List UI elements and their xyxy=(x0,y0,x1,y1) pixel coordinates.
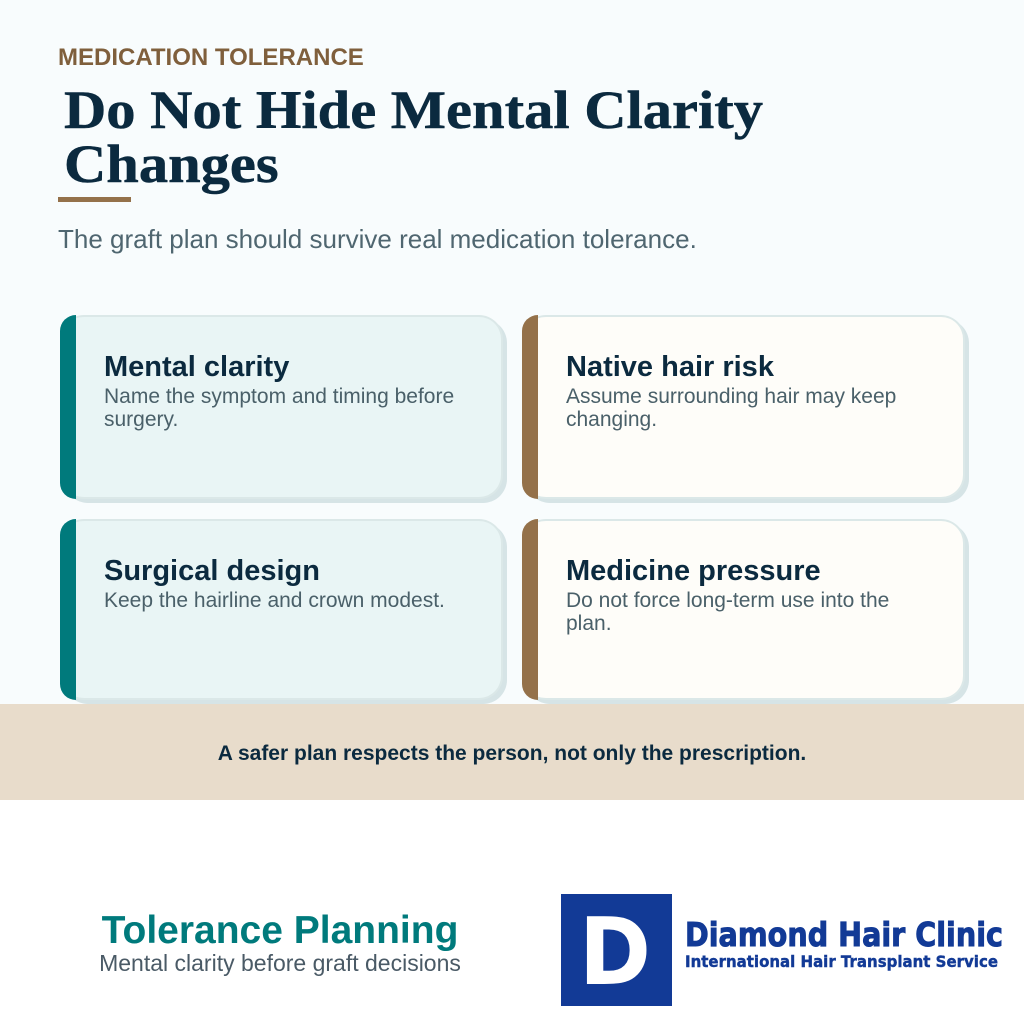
panel: surgical design xyxy=(60,519,507,704)
title: Changes xyxy=(64,134,279,194)
callout text: A safer plan respects the person, not only the prescription. xyxy=(218,742,806,765)
title accent rule xyxy=(58,197,131,202)
title xyxy=(64,80,763,194)
text: native hair risk: changing. xyxy=(566,408,657,431)
text: native hair risk: Assume surrounding hair may keep xyxy=(566,385,896,408)
heading: native hair risk: Native hair risk xyxy=(566,351,774,383)
heading: mental clarity: Mental clarity xyxy=(104,351,289,383)
text: mental clarity xyxy=(104,385,454,431)
text: medicine pressure: plan. xyxy=(566,612,612,635)
logo tagline: International Hair Transplant Service xyxy=(685,952,998,971)
text: mental clarity: surgery. xyxy=(104,408,178,431)
panel: mental clarity xyxy=(60,315,507,503)
logo: Diamond Hair Clinic xyxy=(561,894,1003,1006)
icon: logo mark xyxy=(561,894,672,1006)
text: surgical design: Keep the hairline and crown modest. xyxy=(104,589,445,612)
text: medicine pressure: Do not force long-term use into the xyxy=(566,589,889,612)
title: Do Not Hide Mental Clarity xyxy=(64,80,763,140)
subtitle: The graft plan should survive real medication tolerance. xyxy=(58,224,697,254)
footer subheading: Mental clarity before graft decisions xyxy=(99,950,461,976)
text: mental clarity: Name the symptom and timing before xyxy=(104,385,454,408)
text: medicine pressure xyxy=(566,589,889,635)
eyebrow label: MEDICATION TOLERANCE xyxy=(58,44,364,71)
page background xyxy=(0,0,1024,704)
callout band xyxy=(0,704,1024,800)
panel: medicine pressure xyxy=(522,519,969,704)
heading: medicine pressure: Medicine pressure xyxy=(566,555,821,587)
panel: native hair risk xyxy=(522,315,969,503)
footer heading: Tolerance Planning xyxy=(102,909,458,952)
heading: surgical design: Surgical design xyxy=(104,555,320,587)
text: native hair risk xyxy=(566,385,896,431)
icon: logo mark: D xyxy=(579,898,651,1006)
